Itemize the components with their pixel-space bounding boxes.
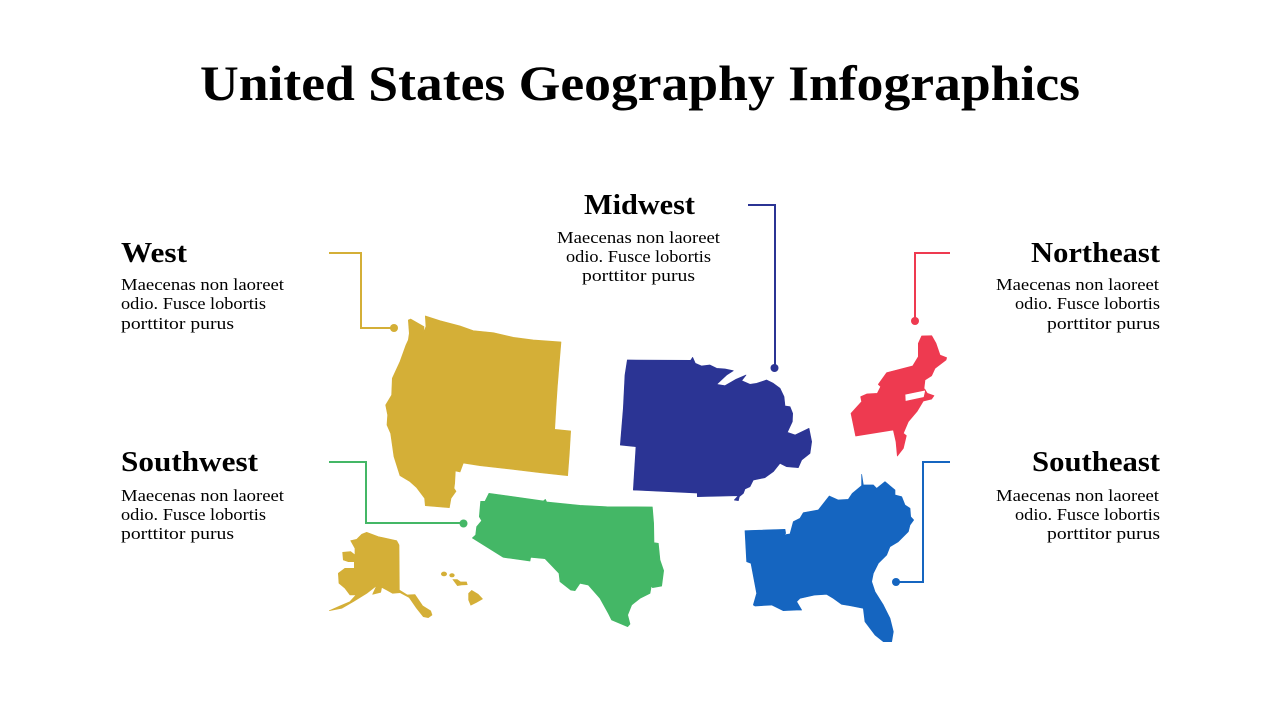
heading: Midwest: Midwest bbox=[584, 189, 695, 221]
map: Alaska bbox=[329, 532, 432, 618]
text block: Northeast: porttitor purus bbox=[1047, 314, 1160, 333]
text block: Midwest bbox=[557, 228, 720, 285]
text block: West: odio. Fusce lobortis bbox=[121, 294, 266, 313]
text block: Northeast bbox=[996, 275, 1160, 333]
title: United States Geography Infographics bbox=[200, 55, 1080, 111]
map: Southeast region bbox=[745, 474, 914, 642]
text block: Midwest: porttitor purus bbox=[582, 266, 695, 285]
text block: Southeast: porttitor purus bbox=[1047, 524, 1160, 543]
panel: West bbox=[121, 237, 571, 618]
map: Southwest region bbox=[472, 493, 664, 627]
text block: Midwest: Maecenas non laoreet bbox=[557, 228, 720, 247]
map: Midwest region bbox=[620, 357, 812, 501]
text block: Midwest: odio. Fusce lobortis bbox=[566, 247, 711, 266]
heading: Northeast: Northeast bbox=[1031, 237, 1160, 269]
heading: Southeast: Southeast bbox=[1032, 446, 1160, 478]
text block: West: Maecenas non laoreet bbox=[121, 275, 284, 294]
connector: Southwest bbox=[329, 462, 468, 528]
map: Hawaii bbox=[441, 572, 483, 606]
text block: Southeast: odio. Fusce lobortis bbox=[1015, 505, 1160, 524]
connector: Midwest bbox=[748, 205, 778, 372]
panel: Southwest bbox=[121, 446, 664, 627]
heading: Southwest: Southwest bbox=[121, 446, 258, 478]
connector: West bbox=[329, 253, 398, 332]
text block: Southwest: Maecenas non laoreet bbox=[121, 486, 284, 505]
text block: Northeast: Maecenas non laoreet bbox=[996, 275, 1159, 294]
map: Northeast region bbox=[851, 336, 947, 456]
connector: Southeast bbox=[892, 462, 950, 586]
text block: Southwest bbox=[121, 486, 284, 543]
heading: West: West bbox=[121, 237, 187, 269]
panel: Midwest bbox=[557, 189, 812, 501]
panel: Southeast bbox=[745, 446, 1160, 642]
map: West region bbox=[386, 316, 571, 508]
panel: Northeast bbox=[851, 237, 1160, 456]
text block: West bbox=[121, 275, 284, 333]
text block: West: porttitor purus bbox=[121, 314, 234, 333]
text block: Southwest: odio. Fusce lobortis bbox=[121, 505, 266, 524]
text block: Southeast: Maecenas non laoreet bbox=[996, 486, 1159, 505]
connector: Northeast bbox=[911, 253, 950, 325]
text block: Southwest: porttitor purus bbox=[121, 524, 234, 543]
text block: Southeast bbox=[996, 486, 1160, 543]
text block: Northeast: odio. Fusce lobortis bbox=[1015, 294, 1160, 313]
